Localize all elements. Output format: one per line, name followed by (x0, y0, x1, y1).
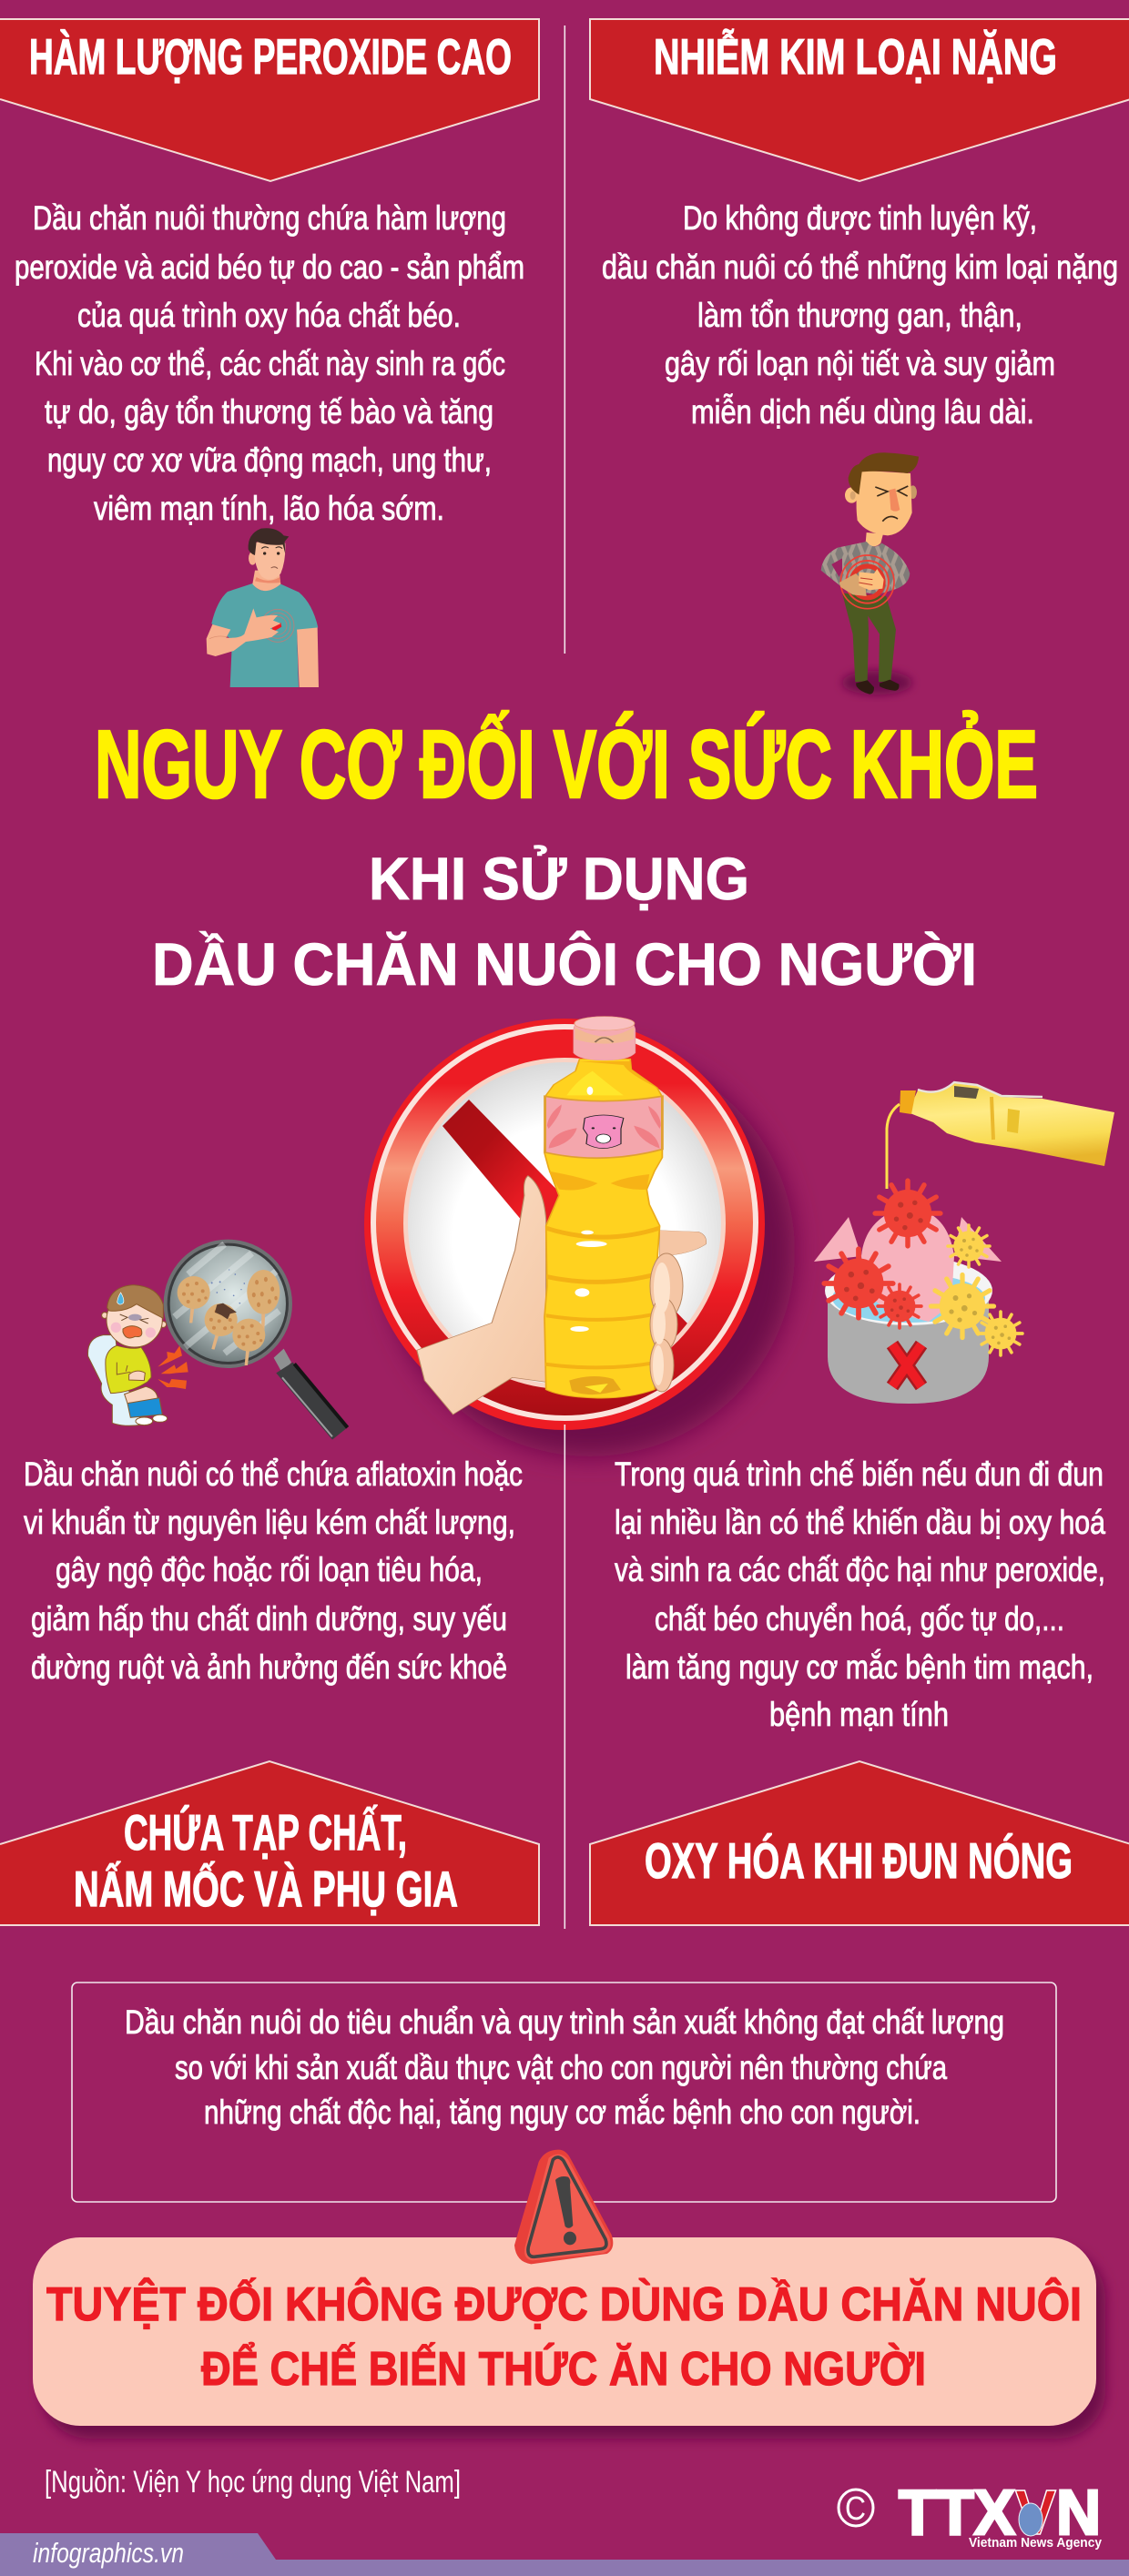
banner: impurities heading (0, 1761, 539, 1925)
text: peroxide description: Khi vào cơ thể, các chất này sinh ra gốc (35, 345, 505, 382)
panel: warning callout (33, 2237, 1105, 2439)
text: peroxide description: của quá trình oxy hóa chất béo. (77, 297, 461, 334)
banner: impurities heading: CHỨA TẠP CHẤT, (124, 1804, 407, 1861)
panel: notice box (72, 1983, 1056, 2202)
logo: TTXVN: TTXVN (899, 2477, 1101, 2548)
hand: fingers (650, 1253, 683, 1392)
text: heavy metals description (602, 199, 1118, 431)
divider: top (564, 25, 565, 654)
magnifying glass (274, 1349, 291, 1373)
panel: oxidation (590, 1455, 1129, 1925)
banner: peroxide heading (0, 19, 539, 181)
text: impurities description: vi khuẩn từ nguyên liệu kém chất lượng, (24, 1504, 515, 1541)
text: peroxide description: Dầu chăn nuôi thường chứa hàm lượng (33, 199, 506, 237)
banner: oxidation heading (590, 1761, 1129, 1925)
source line: [Nguồn: Viện Y học ứng dụng Việt Nam] (45, 2465, 461, 2500)
panel: warning callout: ĐỂ CHẾ BIẾN THỨC ĂN CHO NGƯỜI (201, 2342, 926, 2396)
text: heavy metals description: làm tổn thương gan, thận, (697, 297, 1022, 334)
oil bottle pouring (887, 1082, 1114, 1189)
panel: heavy metals (590, 19, 1129, 695)
illustration: magnifier with mould and sick child (88, 1240, 348, 1440)
subtitle: first line: KHI SỬ DỤNG (369, 845, 749, 912)
text: oxidation description: bệnh mạn tính (769, 1696, 949, 1733)
panel: peroxide (0, 19, 539, 687)
banner: impurities heading: NẤM MỐC VÀ PHỤ GIA (74, 1861, 458, 1917)
text: impurities description: Dầu chăn nuôi có thể chứa aflatoxin hoặc (24, 1455, 523, 1493)
icon: man holding chest (207, 528, 319, 687)
text: heavy metals description: miễn dịch nếu dùng lâu dài. (691, 393, 1034, 431)
bottle: pork oil (544, 1017, 662, 1398)
icon: prohibition sign with oil bottle (364, 1017, 795, 1456)
text: peroxide description: tự do, gây tổn thương tế bào và tăng (45, 393, 493, 431)
footer strip: infographics.vn (0, 2533, 1129, 2576)
subtitle: second line: DẦU CHĂN NUÔI CHO NGƯỜI (152, 930, 977, 998)
panel: impurities (0, 1455, 539, 1925)
copyright symbol: C (845, 2490, 866, 2527)
viruses (824, 1181, 1022, 1355)
footer strip: infographics.vn: infographics.vn (33, 2537, 184, 2569)
panel: notice box: so với khi sản xuất dầu thực vật cho con người nên thường chứa (175, 2049, 947, 2086)
logo: TTXVN: Vietnam News Agency (969, 2535, 1103, 2551)
banner: peroxide heading: HÀM LƯỢNG PEROXIDE CAO (29, 28, 512, 85)
copyright symbol (839, 2490, 873, 2527)
text: peroxide description: nguy cơ xơ vữa động mạch, ung thư, (47, 441, 492, 479)
text: oxidation description (615, 1455, 1105, 1733)
text: impurities description: giảm hấp thu chất dinh dưỡng, suy yếu (31, 1600, 507, 1638)
text: impurities description: gây ngộ độc hoặc rối loạn tiêu hóa, (56, 1551, 483, 1588)
icon: warning triangle (514, 2150, 613, 2264)
text: impurities description: đường ruột và ảnh hưởng đến sức khoẻ (31, 1648, 507, 1686)
text: impurities description (24, 1455, 523, 1686)
text: peroxide description (15, 199, 524, 527)
panel: notice box: những chất độc hại, tăng nguy cơ mắc bệnh cho con người. (204, 2094, 920, 2131)
text: heavy metals description: gây rối loạn nội tiết và suy giảm (665, 345, 1055, 382)
divider: bottom (564, 1425, 565, 1929)
icon: man with stomach pain (821, 452, 919, 695)
text: peroxide description: viêm mạn tính, lão hóa sớm. (94, 490, 444, 527)
text: peroxide description: peroxide và acid béo tự do cao - sản phẩm (15, 248, 524, 286)
pot with pig (814, 1208, 1002, 1404)
hand: thumb and palm (417, 1176, 707, 1415)
illustration: oil poured over pig and viruses in pot (814, 1082, 1114, 1404)
text: heavy metals description: Do không được tinh luyện kỹ, (683, 199, 1037, 237)
banner: heavy metals heading (590, 19, 1129, 181)
child on toilet (88, 1285, 168, 1425)
